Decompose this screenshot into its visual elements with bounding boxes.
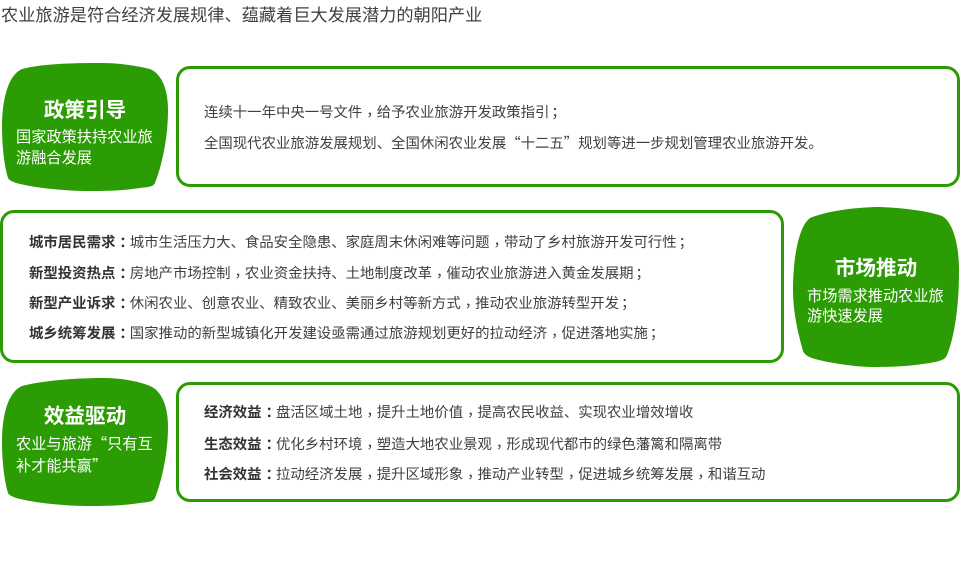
- badge description: 游快速发展: [807, 304, 883, 326]
- text box: [0, 210, 784, 363]
- market line 1: 城市居民需求 ：城市生活压力大、食品安全隐患、家庭周末休闲难等问题 ，带动了乡村旅游开发可行性；: [29, 230, 693, 252]
- badge description: 市场需求推动农业旅: [807, 284, 944, 306]
- badge: benefit drive: [2, 378, 168, 506]
- badge heading: 效益驱动: [44, 399, 126, 429]
- text box: [176, 66, 960, 187]
- badge heading: 政策引导: [44, 93, 126, 123]
- badge description: 农业与旅游“只有互: [16, 432, 153, 454]
- badge heading: 市场推动: [835, 251, 917, 281]
- badge description: [16, 125, 153, 168]
- market line 3: 新型产业诉求 ：休闲农业、创意农业、精致农业、美丽乡村等新方式 ，推动农业旅游转型开发；: [29, 291, 636, 313]
- benefit line 1: 经济效益 ：盘活区域土地 ，提升土地价值 ，提高农民收益、实现农业增效增收: [204, 400, 693, 422]
- badge description: 补才能共赢”: [16, 454, 107, 476]
- badge description: [807, 284, 944, 326]
- benefit line 3: 社会效益 ：拉动经济发展 ，提升区域形象 ，推动产业转型 ，促进城乡统筹发展 ，和谐互动: [204, 462, 765, 484]
- market line 4: 城乡统筹发展 ：国家推动的新型城镇化开发建设亟需通过旅游规划更好的拉动经济 ，促进落地实施；: [29, 321, 664, 343]
- badge: market push: [793, 207, 959, 367]
- policy line 2: 全国现代农业旅游发展规划、全国休闲农业发展“十二五”规划等进一步规划管理农业旅游开发。: [204, 132, 823, 153]
- market line 2: 新型投资热点 ：房地产市场控制 ，农业资金扶持、土地制度改革 ，催动农业旅游进入黄金发展期；: [29, 261, 650, 283]
- badge description: 国家政策扶持农业旅: [16, 125, 153, 147]
- benefit line 2: 生态效益 ：优化乡村环境 ，塑造大地农业景观 ，形成现代都市的绿色藩篱和隔离带: [204, 432, 722, 454]
- panel: benefit drive: [2, 378, 960, 506]
- policy line 1: 连续十一年中央一号文件 ，给予农业旅游开发政策指引；: [204, 100, 566, 122]
- badge: policy guidance: [2, 63, 168, 191]
- badge description: 游融合发展: [16, 146, 92, 168]
- panel: policy guidance: [2, 63, 960, 191]
- badge description: [16, 432, 153, 476]
- panel: market push: [0, 207, 959, 367]
- title: 农业旅游是符合经济发展规律、蕴藏着巨大发展潜力的朝阳产业: [1, 1, 482, 26]
- text box: [176, 382, 960, 502]
